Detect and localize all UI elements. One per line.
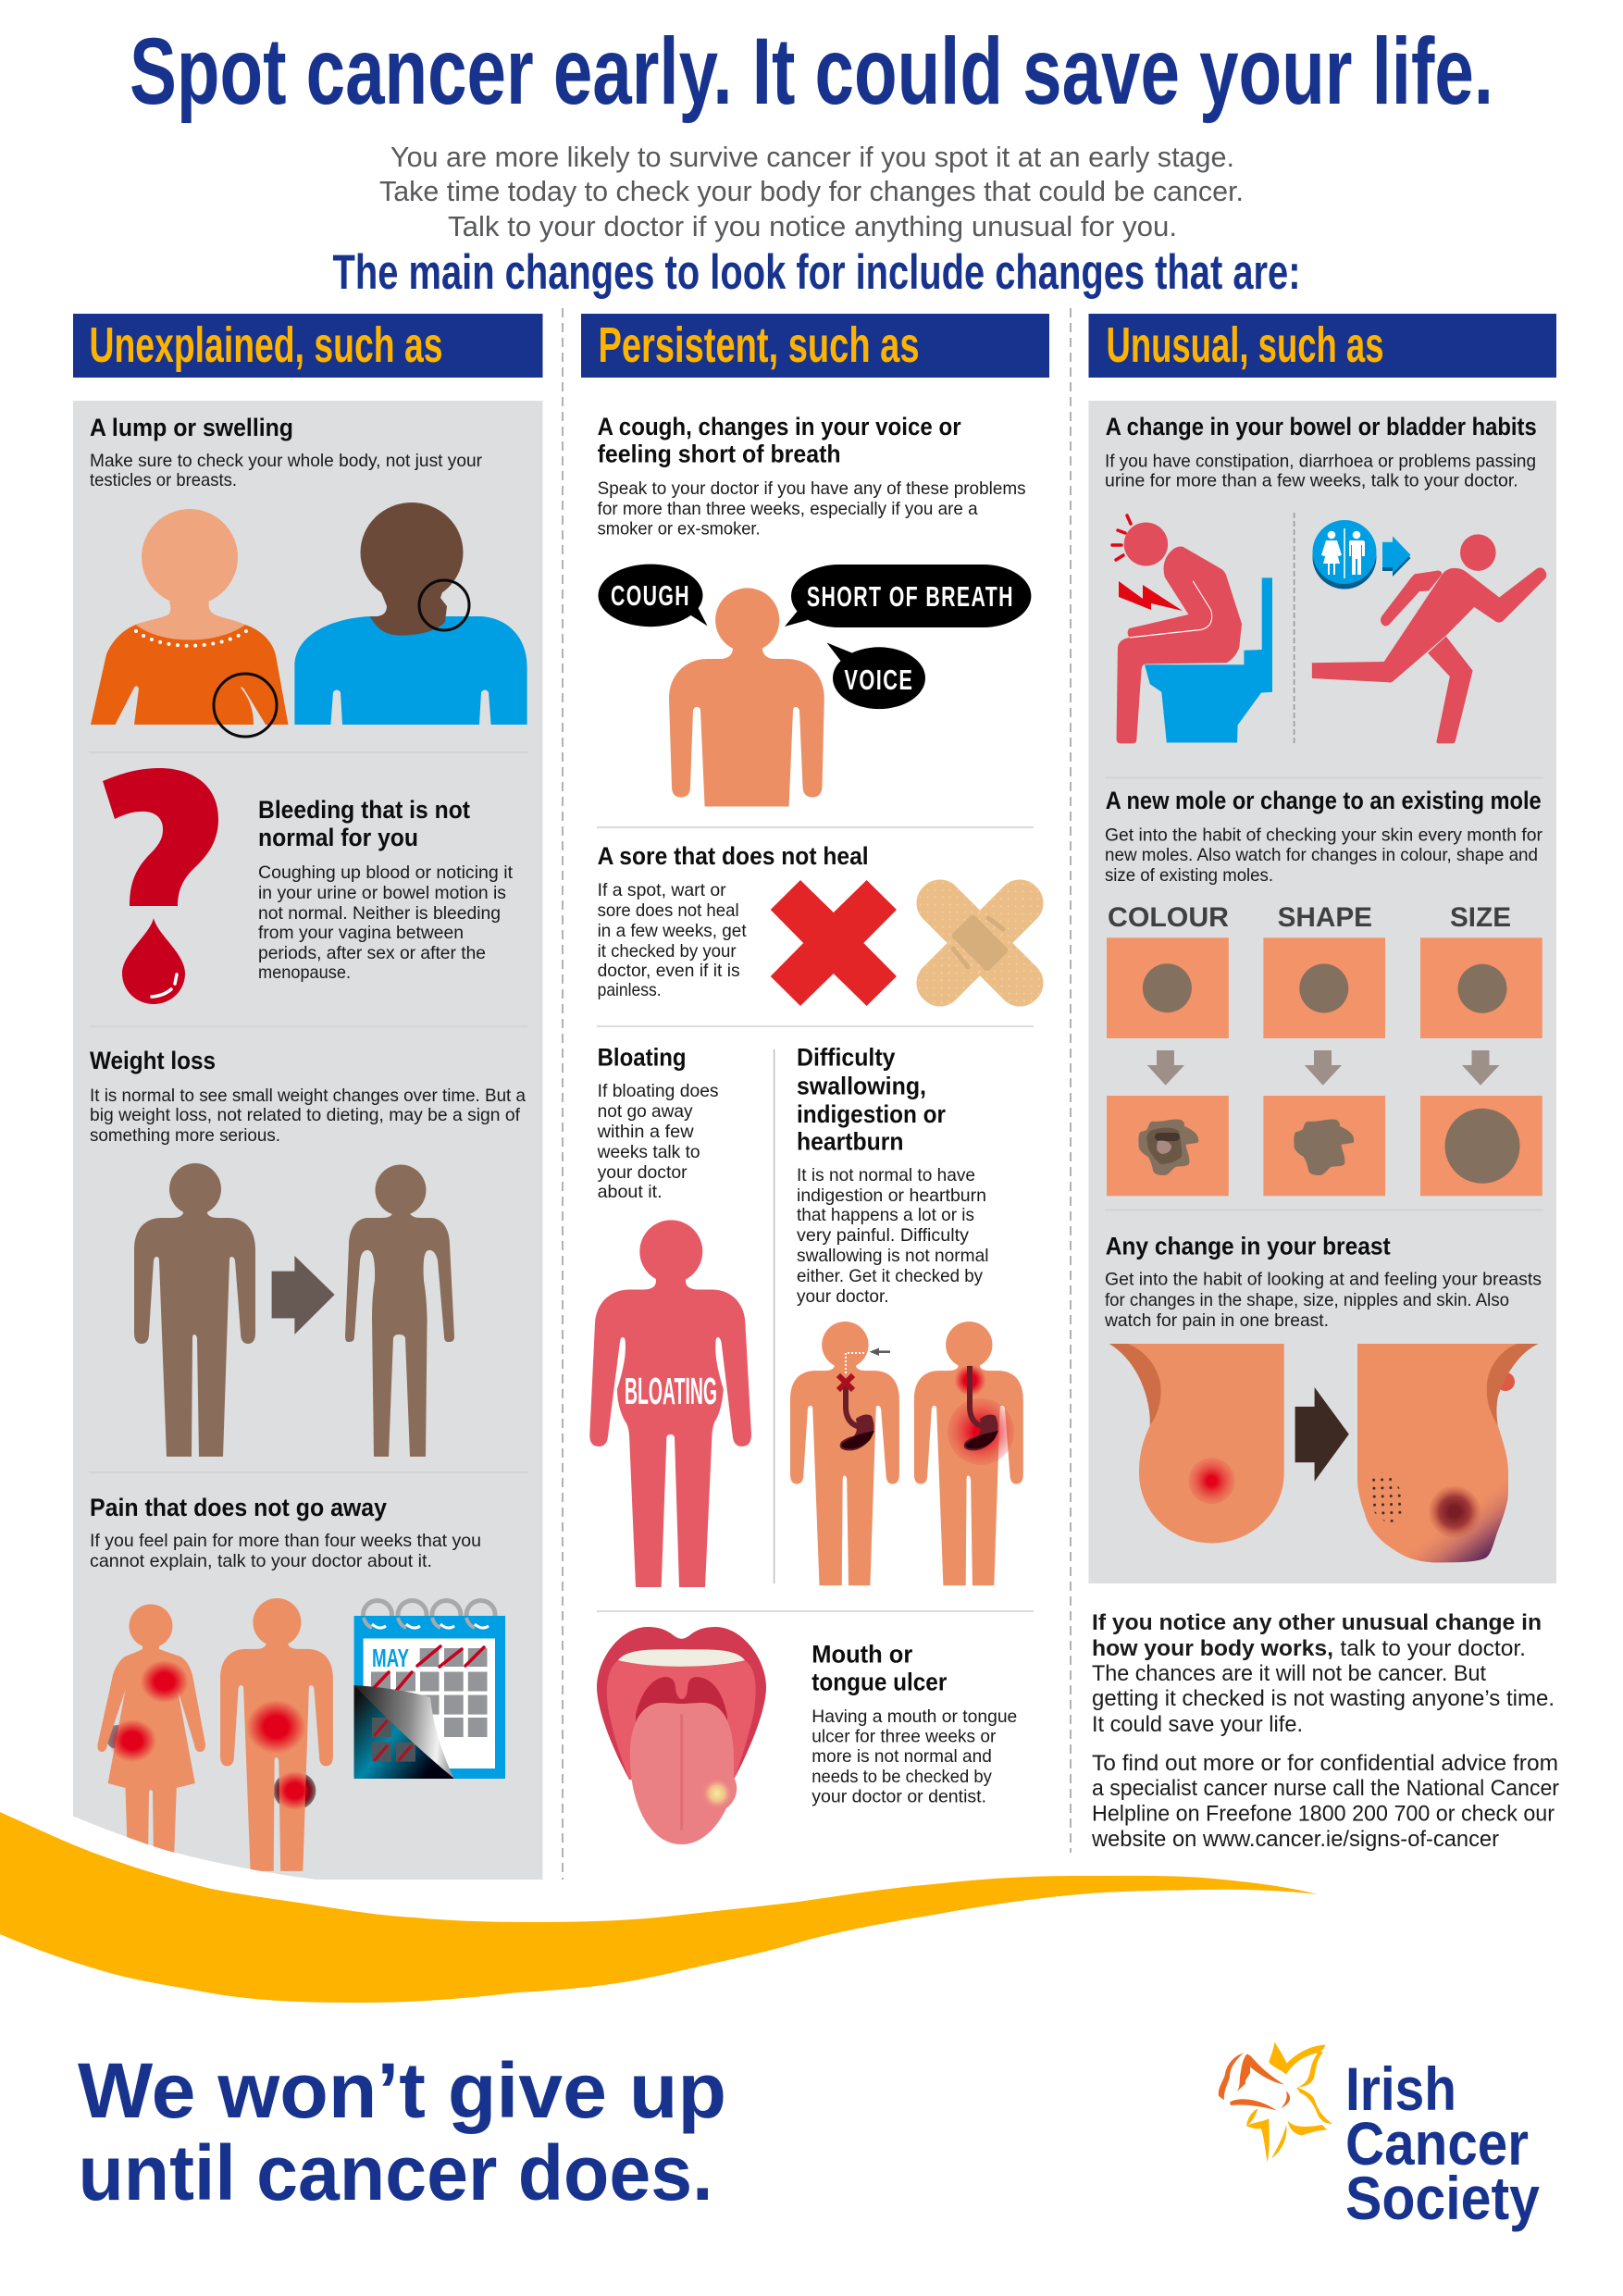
section: lump or swelling: Make sure to check your whole body, not just your xyxy=(90,451,482,471)
section: bowel or bladder: A change in your bowel or bladder habits xyxy=(1106,413,1537,441)
text block: other unusual changes: The chances are it will not be cancer. But xyxy=(1092,1661,1486,1686)
intro text xyxy=(379,141,1244,242)
arrow xyxy=(272,1256,335,1334)
section: breast: Any change in your breast xyxy=(1106,1233,1391,1260)
section: weight loss: It is normal to see small weight changes over time. But a xyxy=(90,1086,526,1106)
illustration: woman in pain xyxy=(97,1605,205,1860)
panel: persistent xyxy=(589,413,1052,1844)
icon: calendar: MAY xyxy=(372,1644,409,1672)
text block: other unusual changes xyxy=(1092,1610,1555,1737)
icon: toilet sign xyxy=(1312,520,1377,589)
section: bleeding: Coughing up blood or noticing it xyxy=(258,863,514,883)
section: cough: feeling short of breath xyxy=(598,441,841,468)
section: bloating xyxy=(589,1044,751,1587)
illustration: man with neck lump xyxy=(294,503,527,725)
slogan xyxy=(78,2047,726,2216)
section: bloating: about it. xyxy=(598,1182,663,1202)
icon: blood drop xyxy=(122,918,185,1004)
section: difficulty swallowing: that happens a lot or is xyxy=(797,1205,974,1225)
illustration: running person xyxy=(1312,534,1546,743)
speech bubble: cough: COUGH xyxy=(611,579,690,612)
mole chart: colour xyxy=(1107,902,1229,1196)
illustration: normal breast xyxy=(1109,1344,1284,1544)
section: sore: If a spot, wart or xyxy=(598,880,726,900)
section: sore xyxy=(598,842,1052,1015)
section: sore: painless. xyxy=(598,980,662,1000)
section: bleeding: not normal. Neither is bleeding xyxy=(258,903,501,924)
section: bloating: not go away xyxy=(598,1101,693,1122)
section: difficulty swallowing: your doctor. xyxy=(797,1286,889,1307)
section: bloating: Bloating xyxy=(598,1044,687,1072)
speech bubble: short of breath: SHORT OF BREATH xyxy=(807,580,1014,613)
text block: other unusual changes: If you notice any other unusual change in xyxy=(1092,1610,1542,1635)
section: difficulty swallowing: very painful. Difficulty xyxy=(797,1225,969,1246)
section: difficulty swallowing: indigestion or xyxy=(797,1100,946,1128)
illustration: bloated body: BLOATING xyxy=(625,1370,717,1412)
illustration: toilet xyxy=(1145,577,1272,742)
section: moles: A new mole or change to an existing mole xyxy=(1106,787,1542,814)
icon: question mark xyxy=(103,768,218,906)
column heading: unexplained: Unexplained, such as xyxy=(89,317,442,373)
logo: Irish Cancer Society: Irish xyxy=(1345,2054,1456,2123)
illustration: thinner body xyxy=(345,1164,454,1457)
section: bowel or bladder: urine for more than a few weeks, talk to your doctor. xyxy=(1105,470,1518,490)
section: mouth ulcer: more is not normal and xyxy=(812,1746,992,1767)
mole chart: shape xyxy=(1263,902,1385,1196)
section: bloating: your doctor xyxy=(598,1162,688,1183)
icon: calendar xyxy=(354,1601,505,1779)
text block: helpline xyxy=(1091,1751,1559,1852)
section: moles: new moles. Also watch for changes in colour, shape and xyxy=(1105,845,1538,865)
section: bloating: weeks talk to xyxy=(597,1142,700,1162)
section: mouth ulcer: tongue ulcer xyxy=(812,1669,948,1696)
section: lump or swelling: testicles or breasts. xyxy=(90,470,237,490)
section: mouth ulcer: Mouth or xyxy=(812,1641,913,1669)
section: weight loss: Weight loss xyxy=(90,1047,216,1074)
illustration: tongue xyxy=(597,1627,766,1844)
text block: other unusual changes: getting it checked is not wasting anyone’s time. xyxy=(1092,1686,1555,1711)
column heading: unusual: Unusual, such as xyxy=(1107,317,1384,373)
section: mouth ulcer: ulcer for three weeks or xyxy=(812,1727,997,1747)
text block: helpline: Helpline on Freefone 1800 200 700 or check our xyxy=(1092,1801,1555,1827)
illustration: person doubled over on toilet xyxy=(1112,515,1242,743)
column heading: persistent: Persistent, such as xyxy=(598,317,920,373)
section: lump or swelling xyxy=(90,414,527,737)
illustration: difficulty swallowing body xyxy=(790,1322,899,1585)
section: mouth ulcer: Having a mouth or tongue xyxy=(812,1706,1017,1727)
section: difficulty swallowing: Difficulty xyxy=(797,1044,896,1072)
text block: other unusual changes: It could save your life. xyxy=(1092,1712,1303,1737)
section: sore: it checked by your xyxy=(598,941,737,962)
section: bleeding: from your vagina between xyxy=(258,923,464,943)
section: bleeding: Bleeding that is not xyxy=(258,796,470,824)
speech bubble: short of breath xyxy=(785,565,1031,627)
illustration: torso xyxy=(669,588,824,807)
mole chart: size: SIZE xyxy=(1450,902,1511,933)
section: pain xyxy=(90,1494,505,1871)
section: difficulty swallowing: It is not normal to have xyxy=(797,1165,975,1185)
text block: helpline: website on www.cancer.ie/signs-of-cancer xyxy=(1091,1827,1499,1852)
section: bleeding: in your urine or bowel motion is xyxy=(258,883,506,903)
arrow: to toilet xyxy=(1382,536,1410,577)
section: mouth ulcer: needs to be checked by xyxy=(812,1767,992,1787)
section: difficulty swallowing xyxy=(790,1044,1023,1585)
illustration: changed breast xyxy=(1357,1344,1539,1562)
section: breast: watch for pain in one breast. xyxy=(1104,1310,1329,1331)
section: bloating: If bloating does xyxy=(598,1081,719,1101)
section: moles: size of existing moles. xyxy=(1105,865,1273,886)
illustration: larger body xyxy=(134,1163,255,1457)
text block: helpline: To find out more or for confidential advice from xyxy=(1092,1751,1558,1776)
logo: Irish Cancer Society: Society xyxy=(1345,2164,1540,2232)
illustration: woman with lump xyxy=(91,509,289,737)
section: pain: If you feel pain for more than four weeks that you xyxy=(90,1531,481,1551)
section: sore: sore does not heal xyxy=(598,900,739,921)
section: difficulty swallowing: swallowing is not normal xyxy=(797,1246,988,1266)
logo: Irish Cancer Society: Cancer xyxy=(1345,2109,1529,2178)
section: pain: Pain that does not go away xyxy=(90,1494,387,1521)
panel: unusual xyxy=(1088,401,1556,1583)
speech bubble: voice xyxy=(827,642,925,709)
section: bleeding xyxy=(103,768,514,1004)
section: moles xyxy=(1105,787,1542,1196)
section: weight loss xyxy=(90,1047,526,1457)
section: sore: doctor, even if it is xyxy=(598,961,740,981)
section: cough xyxy=(598,413,1031,807)
arrow xyxy=(1295,1387,1349,1482)
mole chart: colour: COLOUR xyxy=(1108,902,1229,933)
slogan: We won’t give up xyxy=(78,2047,726,2134)
section: lump or swelling: A lump or swelling xyxy=(90,414,293,441)
section: sore: in a few weeks, get xyxy=(598,921,747,941)
section: breast: Get into the habit of looking at and feeling your breasts xyxy=(1105,1270,1542,1290)
section: cough: for more than three weeks, especially if you are a xyxy=(598,499,978,519)
icon: red cross xyxy=(771,880,897,1006)
section: bleeding: periods, after sex or after the xyxy=(258,943,486,963)
panel: unexplained xyxy=(73,401,542,1880)
text block: other unusual changes: talk to your doctor. xyxy=(1340,1636,1526,1661)
intro text: You are more likely to survive cancer if you spot it at an early stage. xyxy=(390,141,1234,173)
section: difficulty swallowing: indigestion or heartburn xyxy=(797,1185,986,1206)
section: weight loss: something more serious. xyxy=(90,1125,280,1146)
section: breast: for changes in the shape, size, nipples and skin. Also xyxy=(1105,1290,1509,1310)
icon: plaster xyxy=(908,871,1052,1015)
section: weight loss: big weight loss, not related to dieting, may be a sign of xyxy=(90,1105,521,1125)
logo: Irish Cancer Society xyxy=(1219,2042,1540,2232)
speech bubble: voice: VOICE xyxy=(844,664,913,696)
slogan: until cancer does. xyxy=(78,2129,712,2216)
text block: other unusual changes: how your body works, xyxy=(1092,1636,1333,1661)
illustration: man in pain xyxy=(220,1598,333,1871)
illustration: bloated body xyxy=(589,1220,751,1587)
section: breast xyxy=(1104,1233,1542,1562)
section: pain: cannot explain, talk to your doctor about it. xyxy=(90,1551,432,1571)
section: sore: A sore that does not heal xyxy=(598,842,869,870)
sub heading: The main changes to look for include changes that are: xyxy=(333,245,1301,300)
section: bleeding: menopause. xyxy=(258,962,351,983)
section: mouth ulcer xyxy=(597,1627,1017,1844)
section: mouth ulcer: your doctor or dentist. xyxy=(812,1787,986,1807)
mole chart: size xyxy=(1420,902,1542,1196)
intro text: Take time today to check your body for changes that could be cancer. xyxy=(379,175,1244,207)
section: cough: A cough, changes in your voice or xyxy=(598,413,961,441)
section: bleeding: normal for you xyxy=(258,824,418,851)
section: bloating: within a few xyxy=(597,1122,695,1142)
section: difficulty swallowing: either. Get it checked by xyxy=(797,1266,983,1286)
illustration: heartburn body xyxy=(914,1322,1023,1585)
section: cough: Speak to your doctor if you have any of these problems xyxy=(598,478,1026,499)
icon: daffodil xyxy=(1219,2042,1332,2163)
section: bowel or bladder xyxy=(1105,413,1546,744)
section: bowel or bladder: If you have constipation, diarrhoea or problems passing xyxy=(1105,452,1536,472)
section: moles: Get into the habit of checking your skin every month for xyxy=(1105,825,1542,846)
intro text: Talk to your doctor if you notice anything unusual for you. xyxy=(448,210,1177,242)
speech bubble: cough xyxy=(598,565,707,627)
orange swoosh xyxy=(0,1812,1318,2003)
section: difficulty swallowing: swallowing, xyxy=(797,1072,926,1099)
section: difficulty swallowing: heartburn xyxy=(797,1127,903,1155)
section: cough: smoker or ex-smoker. xyxy=(598,518,761,539)
text block: helpline: a specialist cancer nurse call the National Cancer xyxy=(1092,1776,1559,1801)
mole chart: shape: SHAPE xyxy=(1278,902,1372,933)
